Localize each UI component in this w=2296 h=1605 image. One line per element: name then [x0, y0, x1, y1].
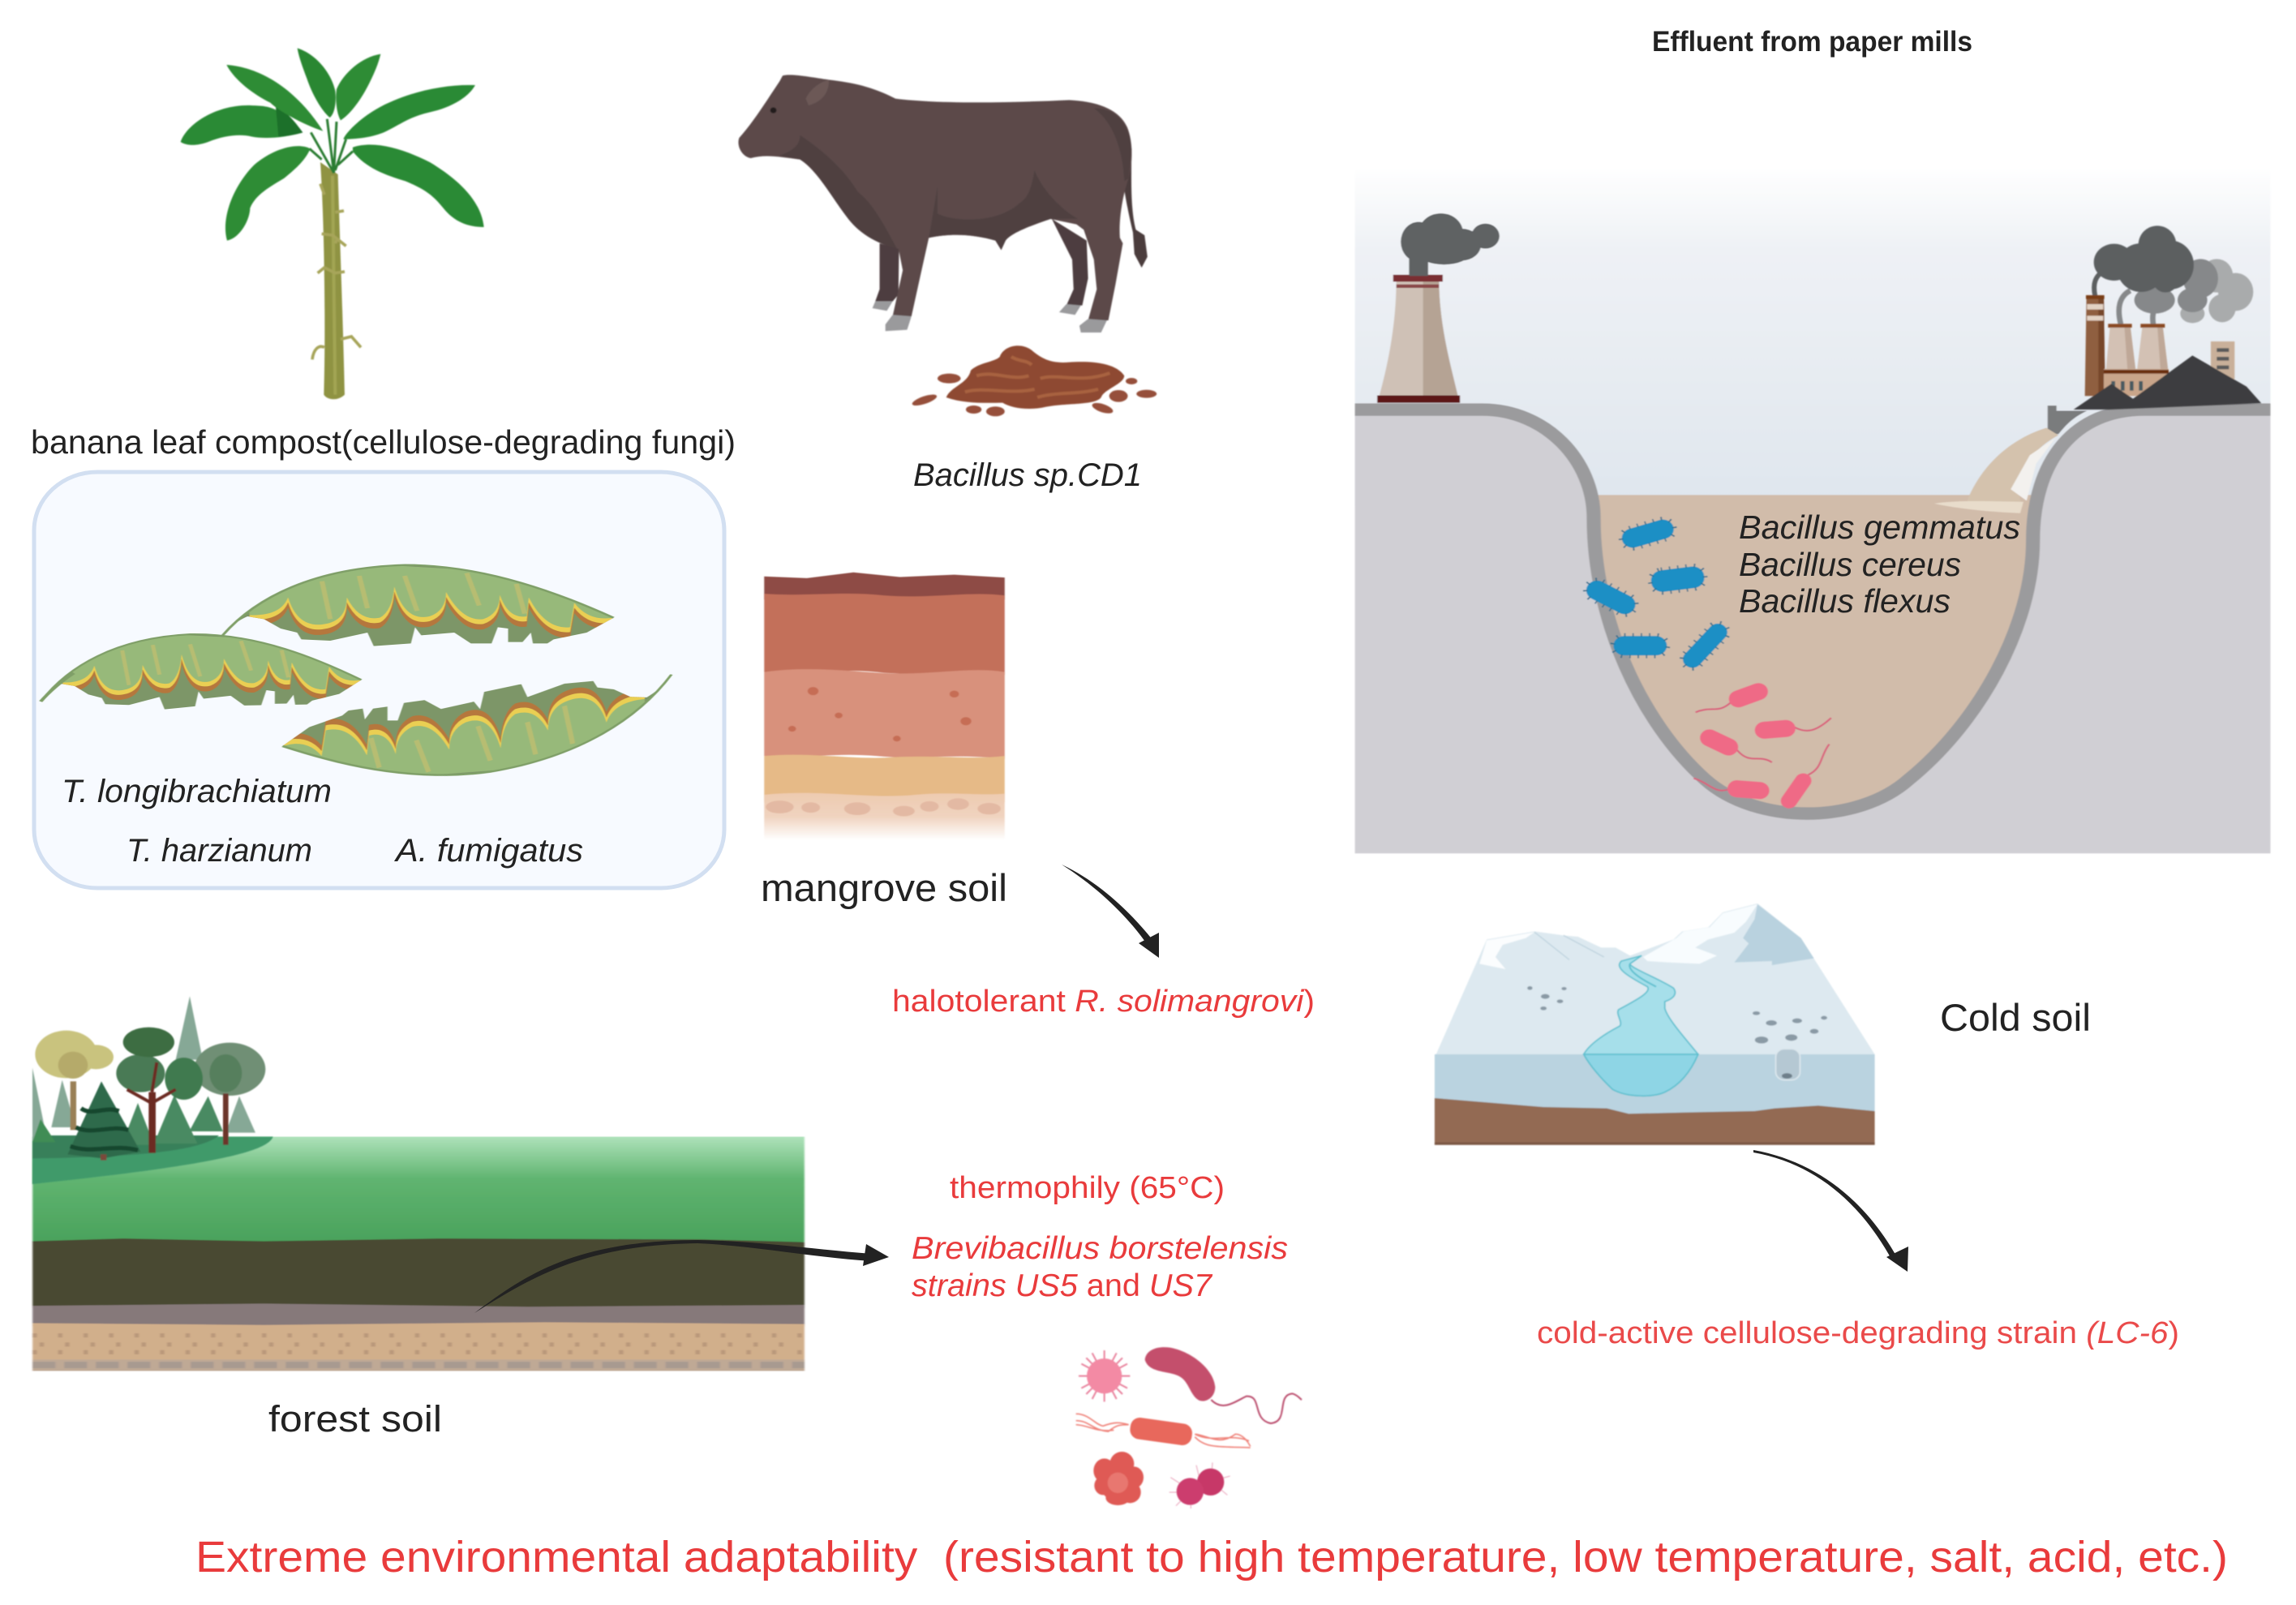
mid spruces — [122, 1095, 223, 1145]
factory smoke — [2094, 225, 2253, 324]
tower smoke — [1401, 213, 1500, 276]
blue bacteria — [1582, 517, 1732, 672]
ice holes — [1527, 986, 1827, 1044]
decaying leaves — [34, 557, 680, 809]
forest soil profile — [32, 1137, 805, 1371]
cow — [738, 75, 1148, 333]
cooling tower — [1377, 213, 1500, 403]
coal piles — [2074, 355, 2261, 410]
label: Brevibacillus strains: strains US5 and US7 — [912, 1268, 1212, 1303]
curved bacterium — [1145, 1347, 1302, 1423]
panel: decaying banana leaves with fungi — [34, 472, 724, 888]
virus — [1079, 1350, 1130, 1401]
flagellated bacterium — [1076, 1414, 1251, 1448]
panel: effluent pit scene — [1355, 165, 2270, 853]
cocci cluster — [1093, 1452, 1144, 1505]
effluent water — [1577, 495, 2049, 836]
cow shading — [779, 108, 1131, 250]
cow tail — [1122, 138, 1148, 268]
cow hooves — [873, 302, 1107, 333]
microbes group — [1076, 1347, 1302, 1508]
species list: Bacillus strains — [1739, 509, 2020, 620]
ice surface and mountains — [1436, 903, 1875, 1054]
dark center tree — [116, 1028, 203, 1153]
cow body — [738, 75, 1131, 320]
arrow: cold soil to strain — [1753, 1150, 1908, 1272]
twin towers — [2106, 324, 2168, 371]
species list: Bacillus strains: Bacillus gemmatus — [1739, 509, 2020, 546]
species list: Bacillus strains: Bacillus cereus — [1739, 546, 1961, 583]
factory building — [2104, 369, 2169, 396]
banana plant — [181, 48, 484, 399]
label: cold soil: Cold soil — [1940, 996, 2091, 1039]
species: T. harzianum: T. harzianum — [127, 833, 312, 869]
label: cold-active strain: cold-active cellulose-degrading strain (LC-6) — [1537, 1316, 2179, 1350]
ice front — [1435, 1054, 1875, 1114]
main chimney — [2085, 295, 2105, 396]
label: Brevibacillus strains — [912, 1231, 1288, 1303]
cow ear and eye — [806, 79, 829, 105]
humus layer — [32, 1238, 805, 1308]
label: forest soil: forest soil — [268, 1398, 442, 1440]
factory with smoke and coal — [2074, 225, 2261, 410]
label: mangrove soil: mangrove soil — [761, 866, 1007, 909]
label: banana leaf compost: banana leaf compost(cellulose-degrading fungi) — [31, 423, 736, 461]
banana petioles — [310, 119, 353, 173]
title: effluent from paper mills: Effluent from paper mills — [1652, 26, 1972, 58]
office building — [2211, 341, 2234, 380]
panel background — [34, 472, 724, 888]
arrow: mangrove to halotolerant — [1062, 865, 1159, 958]
forest trees on hill — [32, 996, 273, 1184]
grass layer — [32, 1137, 805, 1242]
rock base — [1435, 1098, 1875, 1145]
hill — [32, 1137, 273, 1184]
effluent outflow — [1934, 428, 2058, 513]
sandy layer — [32, 1322, 805, 1371]
meltwater river and lake — [1584, 955, 1698, 1096]
discharge pipe — [2048, 406, 2087, 434]
species: A. fumigatus: A. fumigatus — [394, 833, 583, 869]
background conifers — [32, 996, 255, 1141]
bottom headline: Extreme environmental adaptability (resistant to high temperature, low temperature, salt, acid, etc.) — [195, 1533, 2228, 1581]
label: Brevibacillus strains: Brevibacillus borstelensis — [912, 1231, 1288, 1266]
label: thermophily: thermophily (65°C) — [950, 1171, 1225, 1205]
glacier cold soil block — [1435, 903, 1875, 1145]
species list: Bacillus strains: Bacillus flexus — [1739, 582, 1951, 620]
diplococci — [1169, 1462, 1230, 1508]
banana trunk — [312, 162, 361, 399]
ground with pit — [1355, 410, 2270, 853]
label: Bacillus sp.CD1: Bacillus sp.CD1 — [913, 457, 1142, 493]
cow far legs — [875, 219, 1088, 306]
species: T. longibrachiatum: T. longibrachiatum — [62, 774, 332, 809]
right tree — [194, 1043, 265, 1145]
mangrove soil column — [764, 573, 1005, 840]
large spruce — [67, 1081, 140, 1161]
manure pile — [911, 345, 1157, 416]
gray layer — [32, 1303, 805, 1326]
label: halotolerant R. solimangrovi: halotolerant R. solimangrovi ) — [892, 985, 1315, 1019]
red bacteria — [1693, 680, 1831, 811]
yellow tree — [35, 1031, 114, 1130]
arrow: forest soil to thermophiles — [474, 1240, 889, 1313]
pit outline — [1355, 410, 2270, 813]
sky — [1355, 165, 2270, 506]
banana leaves — [181, 48, 484, 241]
